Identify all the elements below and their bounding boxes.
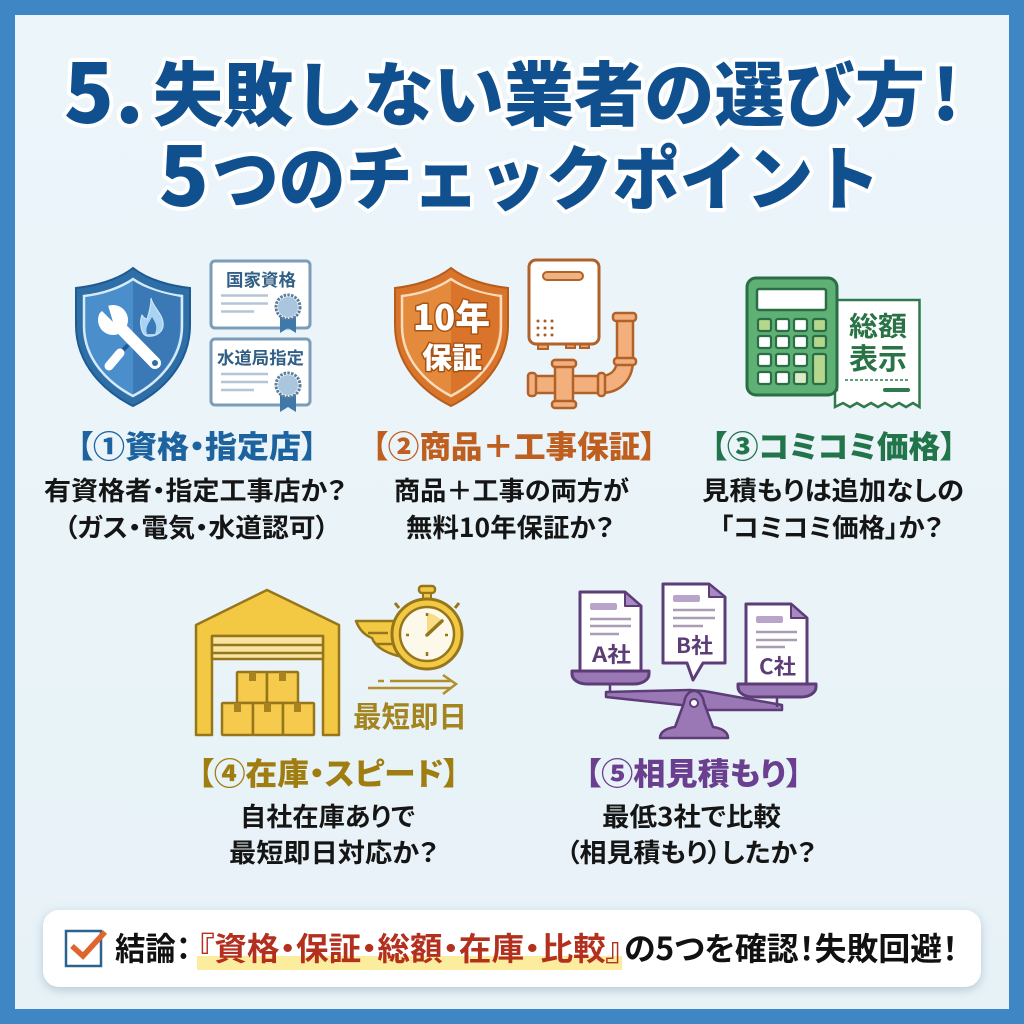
icon: winged stopwatch (356, 586, 462, 669)
icon: receipt (835, 300, 920, 407)
document B: B社 (676, 630, 713, 660)
panel: 3 all-in price (702, 278, 964, 545)
body text: 商品＋工事の両方が (394, 471, 629, 508)
panel: 4 stock and speed (196, 586, 467, 870)
body text (394, 471, 629, 545)
title: ! (932, 40, 960, 141)
icon: calculator (747, 278, 837, 395)
title: 5 (159, 111, 209, 230)
icon: certificate waterworks designation: 水道局指定 (217, 344, 304, 369)
title: . (115, 28, 144, 147)
document C (746, 604, 807, 684)
icon: certificate waterworks designation (211, 339, 310, 412)
heading: 【①資格・指定店】 (77, 422, 317, 467)
icon: certificate national qualification: 国家資格 (226, 266, 296, 291)
icon: checkbox (66, 931, 105, 966)
icon: warehouse with boxes (196, 590, 339, 735)
body text: （相見積もり）したか？ (566, 833, 816, 870)
body text: 有資格者・指定工事店か？ (44, 471, 346, 508)
body text: 「コミコミ価格」か？ (720, 508, 943, 545)
body text: （ガス・電気・水道認可） (64, 508, 329, 545)
body text (44, 471, 346, 545)
heading: 【④在庫・スピード】 (198, 749, 459, 794)
document A (580, 592, 641, 672)
icon label: 最短即日 (353, 694, 467, 736)
panel: 1 qualification (44, 261, 346, 545)
conclusion text: の5つを確認！失敗回避！ (624, 924, 958, 970)
body text (229, 797, 438, 870)
body text: 自社在庫ありで (240, 797, 415, 834)
title: つのチェックポイント (212, 124, 880, 225)
icon: copper pipes (528, 313, 636, 408)
icon: receipt: 表示 (849, 336, 907, 378)
panel: 2 warranty (372, 260, 656, 545)
body text: 見積もりは追加なしの (702, 471, 964, 508)
arrow: speed (368, 675, 456, 694)
title: 失敗しない業者の選び方 (153, 40, 925, 141)
title: 5 (64, 28, 114, 147)
icon: orange 10 year warranty shield: 保証 (422, 335, 482, 377)
conclusion bar (43, 910, 981, 987)
icon: water heater (529, 260, 599, 349)
icon: orange 10 year warranty shield (395, 268, 508, 406)
document C: C社 (759, 651, 796, 681)
icon: orange 10 year warranty shield: 10年 (413, 290, 490, 341)
body text (702, 471, 964, 545)
icon: blue shield with wrench and flame (76, 268, 190, 406)
conclusion text: 結論： (115, 924, 191, 970)
body text: 無料10年保証か？ (406, 508, 614, 545)
icon: receipt: 総額 (849, 305, 907, 344)
heading: 【⑤相見積もり】 (585, 749, 802, 794)
document A: A社 (591, 639, 631, 669)
title (64, 28, 960, 230)
icon: certificate national qualification (211, 261, 310, 333)
heading: 【②商品＋工事保証】 (372, 422, 656, 467)
document B (663, 584, 725, 680)
panel: 5 comparison (566, 584, 816, 870)
body text (566, 797, 816, 870)
heading: 【③コミコミ価格】 (711, 422, 956, 467)
conclusion text (115, 924, 958, 970)
highlight (197, 956, 622, 970)
body text: 最低3社で比較 (602, 797, 781, 834)
conclusion text: 『資格・保証・総額・在庫・比較』 (198, 924, 622, 970)
icon: documents on a balance scale (572, 584, 816, 738)
body text: 最短即日対応か？ (229, 833, 438, 870)
